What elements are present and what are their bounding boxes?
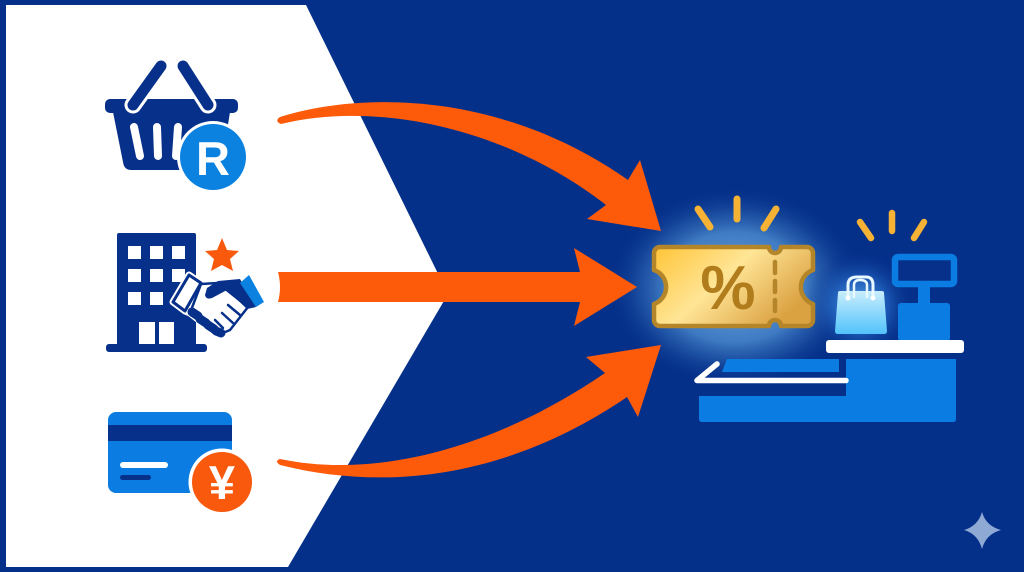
coupon ticket: % <box>700 254 756 323</box>
white chevron panel <box>6 5 448 567</box>
icon: shopping basket with R badge: R <box>196 132 230 185</box>
icon: office building with star and handshake <box>106 233 264 352</box>
icon: sparkle watermark <box>964 512 1001 549</box>
icon: credit card with yen badge: ¥ <box>209 456 235 509</box>
icon: credit card with yen badge <box>108 412 256 516</box>
arrow: basket to coupon <box>277 102 661 231</box>
icon: shopping basket with R badge <box>105 66 249 193</box>
register sparkle rays <box>860 213 924 238</box>
coupon sparkle rays <box>698 199 776 228</box>
glow behind coupon <box>607 187 863 387</box>
arrow: building to coupon <box>278 248 637 326</box>
arrow: card to coupon <box>277 345 661 477</box>
icon: shopping bag <box>835 277 887 334</box>
cash register and checkout counter <box>697 257 964 422</box>
coupon ticket <box>654 247 813 326</box>
glow behind shopping bag <box>806 251 914 359</box>
